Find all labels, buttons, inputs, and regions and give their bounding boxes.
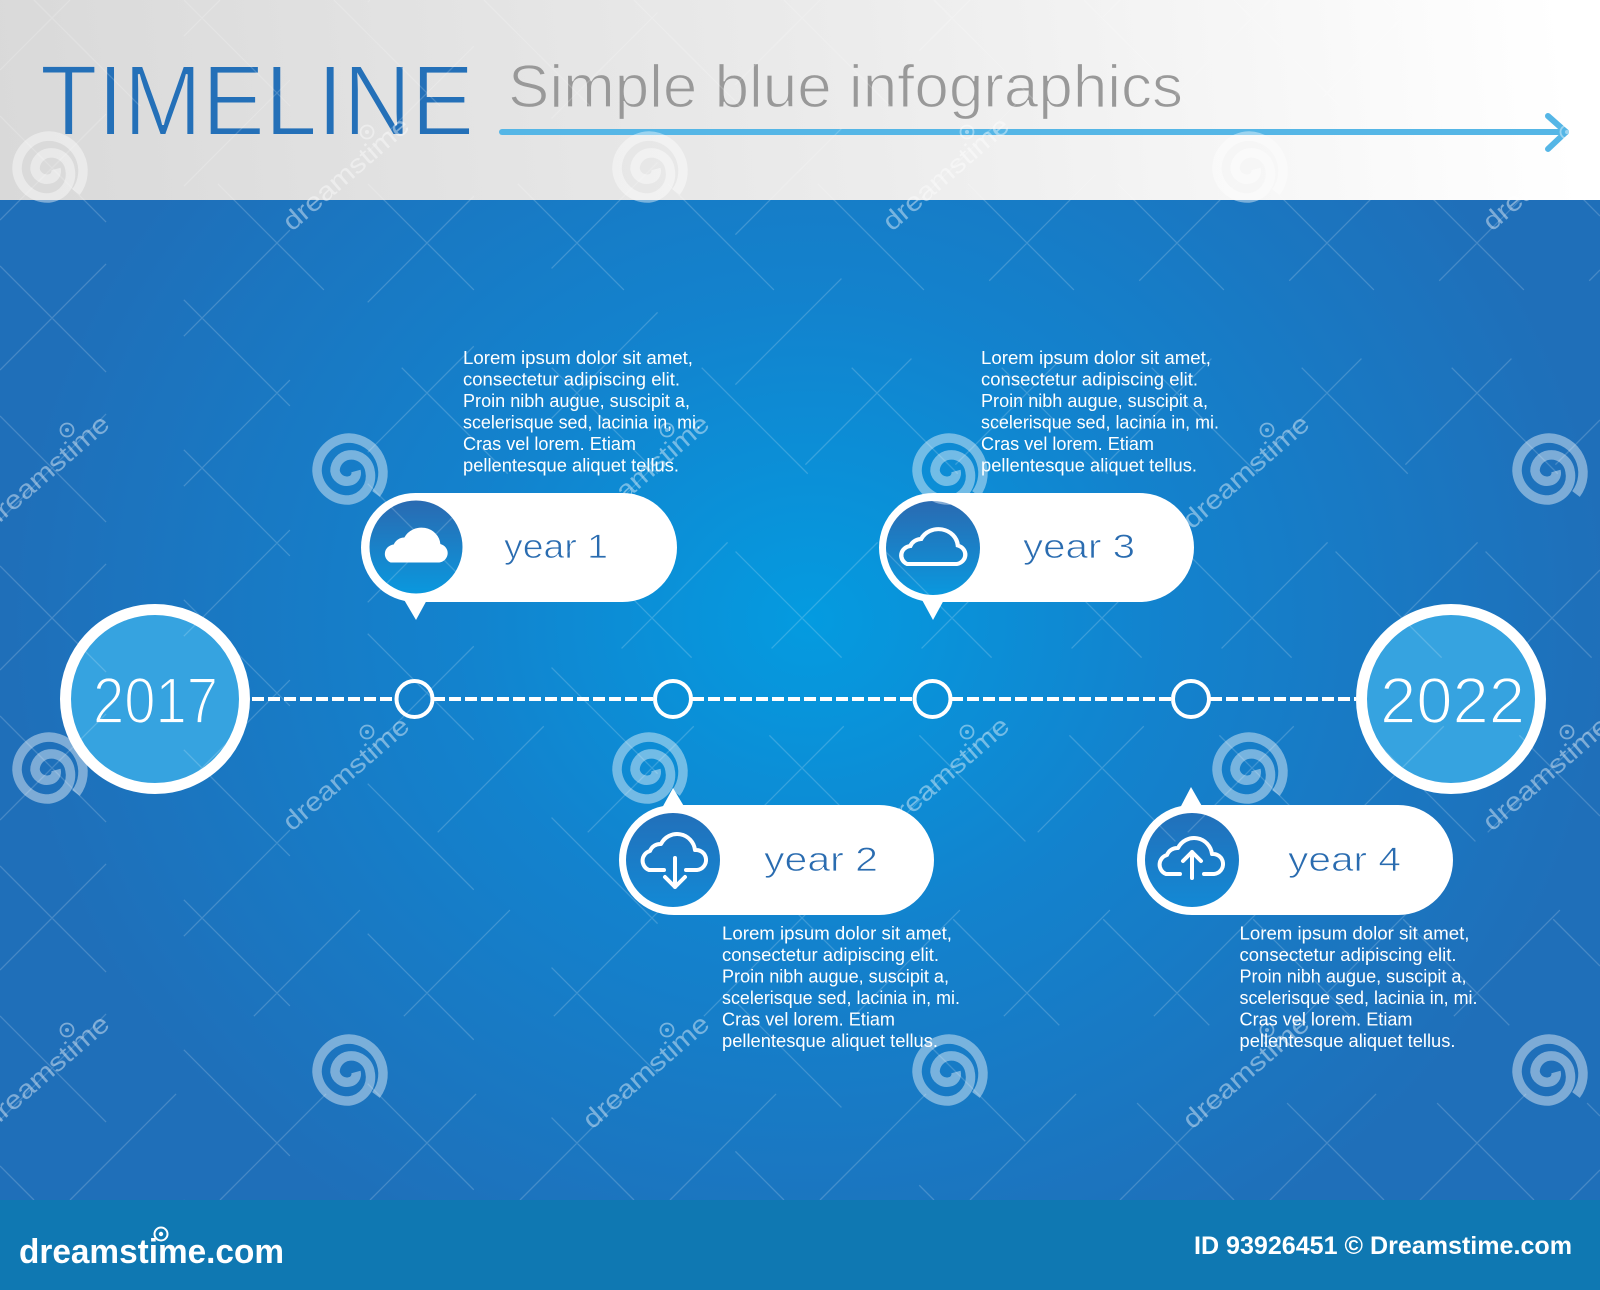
year 1 pill	[361, 493, 677, 620]
icon: solid cloud	[370, 500, 462, 594]
year 1 text block: pellentesque aliquet tellus.	[463, 456, 679, 476]
year 4 label: year 4	[1288, 841, 1401, 879]
watermark overlay: dreamstime	[1476, 710, 1600, 837]
year 1 text block: scelerisque sed, lacinia in, mi.	[463, 412, 701, 432]
year 4 text block: Cras vel lorem. Etiam	[1240, 1010, 1412, 1030]
year 1 text block: Lorem ipsum dolor sit amet,	[463, 348, 693, 368]
year 1 label: year 1	[504, 528, 608, 566]
timeline node 4	[1173, 681, 1209, 717]
year 2 text block: Cras vel lorem. Etiam	[722, 1010, 895, 1030]
year 1 text block: consectetur adipiscing elit.	[463, 370, 680, 390]
timeline node 3	[914, 681, 950, 717]
year 4 text block	[1240, 924, 1478, 1051]
arrow: header timeline arrow	[502, 116, 1566, 149]
watermark overlay: dreamstime	[576, 408, 715, 535]
timeline node 2	[655, 681, 691, 717]
year 3 text block: Lorem ipsum dolor sit amet,	[981, 348, 1211, 368]
year 1 text block: Proin nibh augue, suscipit a,	[463, 391, 690, 411]
timeline node 1	[396, 681, 432, 717]
watermark overlay: dreamstime	[1476, 110, 1600, 237]
icon: cloud download	[626, 813, 720, 907]
watermark overlay: dreamstime	[1176, 408, 1315, 535]
icon: outline cloud	[886, 501, 980, 595]
year 2 text block: Lorem ipsum dolor sit amet,	[722, 924, 952, 944]
panel: year 4	[1137, 787, 1478, 1051]
year 2 label: year 2	[764, 841, 878, 879]
year 3 text block: pellentesque aliquet tellus.	[981, 456, 1197, 476]
year 4 text block: Proin nibh augue, suscipit a,	[1240, 966, 1466, 986]
panel: year 3	[879, 348, 1219, 620]
year 4 text block: pellentesque aliquet tellus.	[1240, 1031, 1456, 1051]
dashed timeline	[252, 697, 1356, 701]
watermark overlay: dreamstime	[876, 710, 1015, 837]
year 2 text block	[722, 924, 960, 1051]
year 4 text block: scelerisque sed, lacinia in, mi.	[1240, 988, 1478, 1008]
watermark overlay: dreamstime	[1176, 1008, 1315, 1135]
watermark overlay: dreamstime	[576, 1008, 715, 1135]
subtitle: Simple blue infographics	[508, 53, 1183, 120]
blue background panel	[0, 200, 1600, 1200]
watermark overlay: dreamstime	[876, 110, 1015, 237]
footer bar	[0, 1200, 1600, 1290]
year 2 pill	[619, 788, 934, 915]
start year circle 2017	[66, 610, 244, 788]
footer image id: ID 93926451 © Dreamstime.com	[1194, 1232, 1572, 1260]
panel: year 2	[619, 788, 960, 1051]
watermark overlay: dreamstime	[276, 710, 415, 837]
year 1 text block: Cras vel lorem. Etiam	[463, 434, 636, 454]
end year circle 2022: 2022	[1380, 664, 1525, 737]
year 3 text block: consectetur adipiscing elit.	[981, 370, 1198, 390]
year 3 text block	[981, 348, 1219, 476]
year 4 pill	[1137, 787, 1453, 915]
year 2 text block: scelerisque sed, lacinia in, mi.	[722, 988, 960, 1008]
year 2 text block: Proin nibh augue, suscipit a,	[722, 966, 949, 986]
year 2 text block: consectetur adipiscing elit.	[722, 945, 939, 965]
panel: year 1	[361, 348, 701, 620]
year 4 text block: consectetur adipiscing elit.	[1240, 945, 1456, 965]
year 3 text block: scelerisque sed, lacinia in, mi.	[981, 412, 1219, 432]
year 3 pill	[879, 493, 1194, 620]
footer logo: dreamstime.com	[19, 1233, 284, 1271]
end year circle 2022	[1362, 610, 1540, 788]
year 3 label: year 3	[1023, 528, 1135, 566]
year 2 text block: pellentesque aliquet tellus.	[722, 1031, 938, 1051]
year 1 text block	[463, 348, 701, 476]
start year circle 2017: 2017	[93, 664, 218, 737]
header band	[0, 0, 1600, 200]
title: TIMELINE	[40, 45, 474, 157]
icon: cloud upload	[1145, 813, 1239, 907]
year 3 text block: Cras vel lorem. Etiam	[981, 434, 1154, 454]
watermark overlay: dreamstime	[276, 110, 415, 237]
year 4 text block: Lorem ipsum dolor sit amet,	[1240, 924, 1470, 944]
year 3 text block: Proin nibh augue, suscipit a,	[981, 391, 1208, 411]
